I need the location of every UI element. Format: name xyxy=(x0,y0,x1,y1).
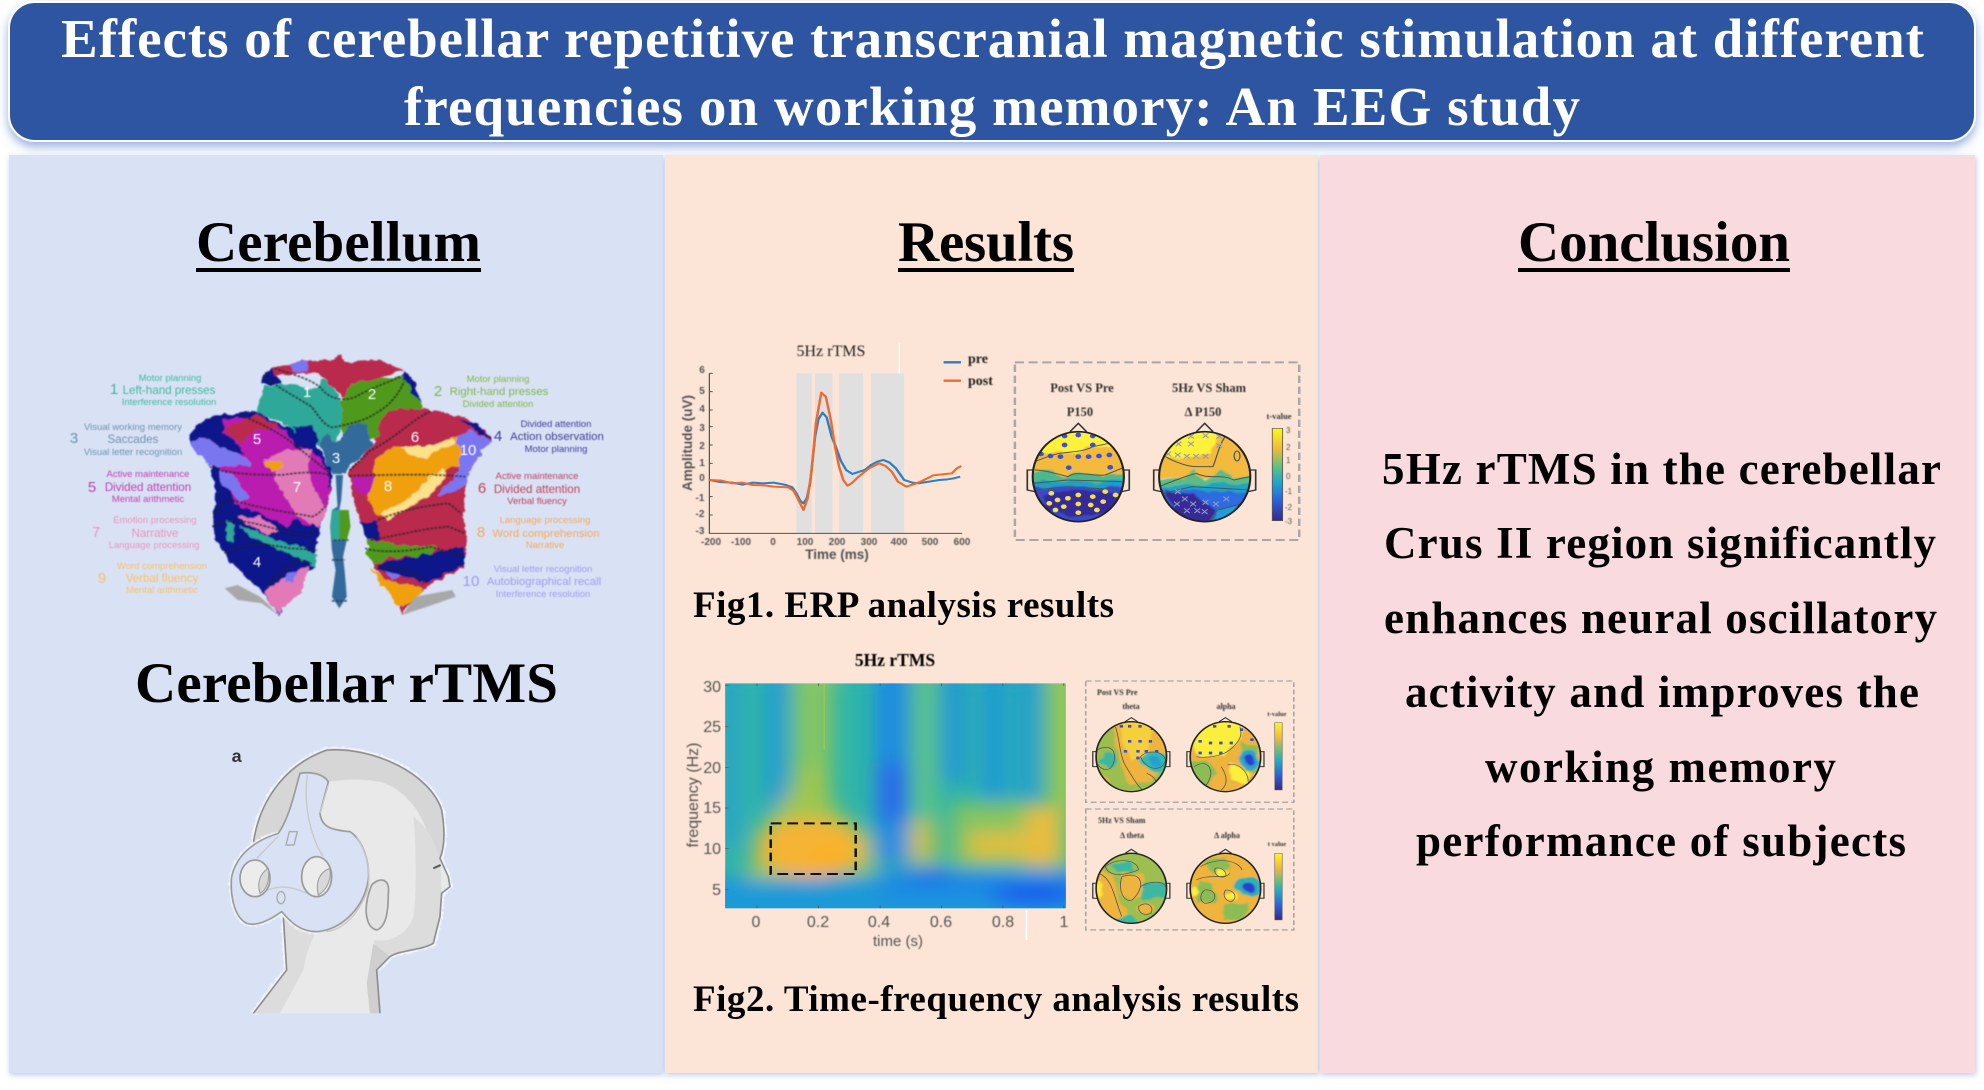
label: region 10: 10 xyxy=(463,573,479,590)
title banner: Effects of cerebellar repetitive transcranial magnetic stimulation at different xyxy=(61,8,1925,69)
illustration: head with figure-8 coil xyxy=(231,746,450,1013)
heatmap title: 5Hz rTMS xyxy=(855,650,935,670)
ERP traces xyxy=(709,343,962,533)
label: region 7: Emotion processing xyxy=(113,515,197,526)
coil wires xyxy=(257,775,369,932)
topomap alpha 5Hz vs sham xyxy=(1191,854,1260,923)
label: region 6: Divided attention xyxy=(494,483,580,496)
ERP topomap labels: Post VS Pre xyxy=(1050,381,1114,395)
colorbar ticks: -1 xyxy=(1285,487,1293,496)
throat shading xyxy=(367,943,390,1013)
map region numbers: 6 xyxy=(411,429,419,446)
small topomap labels: theta xyxy=(1122,702,1140,711)
topomap left xyxy=(1022,423,1134,527)
label: region 1 xyxy=(110,373,216,408)
figure: time-frequency topographies xyxy=(1084,681,1294,930)
small topomap labels: t-value xyxy=(1267,711,1287,718)
right winding xyxy=(302,857,332,897)
label: region 9: Verbal fluency xyxy=(126,572,199,585)
conclusion text xyxy=(1382,444,1941,866)
face shading xyxy=(373,817,442,957)
ERP axes labels: 6 xyxy=(699,365,705,376)
label: region 3: Saccades xyxy=(108,433,159,446)
label: region 10 xyxy=(463,564,601,600)
label: region 3 xyxy=(70,422,182,458)
map region numbers: 10 xyxy=(460,442,476,459)
title banner: frequencies on working memory: An EEG study xyxy=(404,76,1580,137)
conclusion text: 5Hz rTMS in the cerebellar xyxy=(1382,444,1941,494)
label: region 4: Motor planning xyxy=(525,444,587,455)
conclusion text: performance of subjects xyxy=(1416,816,1906,866)
heatmap axes labels: 1 xyxy=(1060,914,1069,931)
heading: Results: Results xyxy=(898,211,1074,274)
ERP axes labels: 600 xyxy=(954,537,971,548)
label: region 5: Mental arithmetic xyxy=(112,494,184,505)
label: region 4: Action observation xyxy=(510,431,604,443)
label: region 8: 8 xyxy=(477,524,485,541)
conclusion text: enhances neural oscillatory xyxy=(1384,593,1938,643)
ERP legend: pre xyxy=(968,352,988,367)
ERP topomap labels: P150 xyxy=(1067,405,1093,419)
panel: cerebellum background xyxy=(9,155,663,1073)
ERP legend xyxy=(968,352,993,389)
heatmap axes labels: 10 xyxy=(703,841,721,858)
label: region 10: Interference resolution xyxy=(496,589,590,600)
heatmap axes labels: 15 xyxy=(703,800,721,817)
small topomap labels xyxy=(1097,688,1287,848)
ERP axes labels: -3 xyxy=(696,526,705,537)
ERP axes labels: 200 xyxy=(829,537,846,548)
label: region 9 xyxy=(98,561,207,596)
label: region 4 xyxy=(494,419,604,455)
ERP axes labels: -200 xyxy=(701,537,721,548)
label: region 5: Active maintenance xyxy=(107,469,189,480)
map region numbers: 3 xyxy=(332,450,340,467)
heatmap axes labels: 0.8 xyxy=(992,914,1014,931)
label: region 8: Language processing xyxy=(500,515,590,526)
caption: Fig2: Fig2. Time-frequency analysis results xyxy=(693,979,1299,1020)
label: region 9: Mental arithmetic xyxy=(126,585,198,596)
label: region 10: Autobiographical recall xyxy=(487,576,601,588)
heatmap axes labels: 5 xyxy=(712,882,721,899)
label: region 1: 1 xyxy=(110,381,118,398)
ERP topomap shapes xyxy=(1015,362,1299,540)
ERP axes labels: Amplitude (uV) xyxy=(680,395,695,491)
label: region 3: Visual working memory xyxy=(84,422,182,433)
label: region 8: Word comprehension xyxy=(492,528,600,540)
ERP axes labels: 2 xyxy=(699,441,705,452)
ERP topomap labels: 5Hz VS Sham xyxy=(1172,381,1247,395)
map region numbers: 4 xyxy=(253,554,261,571)
map region numbers: 5 xyxy=(253,431,261,448)
heatmap axes labels: 0.2 xyxy=(807,914,829,931)
head outline xyxy=(253,750,450,1013)
ERP axes labels: 500 xyxy=(922,537,939,548)
heatmap axes labels xyxy=(685,679,1069,950)
head silhouette xyxy=(253,750,450,1013)
coil halo xyxy=(231,833,317,932)
heading: Cerebellum: Cerebellum xyxy=(196,211,481,274)
ERP topomap labels: t-value xyxy=(1266,411,1292,421)
label: region 9: 9 xyxy=(98,570,106,587)
label: region 6 xyxy=(478,471,580,507)
winding shading xyxy=(259,868,330,895)
label: region 9: Word comprehension xyxy=(117,561,207,572)
heading: Cerebellar rTMS: Cerebellar rTMS xyxy=(135,652,558,715)
title banner xyxy=(9,2,1975,141)
label: region 3: Visual letter recognition xyxy=(84,447,182,458)
nose and eye xyxy=(433,865,441,868)
ERP axes labels: 3 xyxy=(699,423,705,434)
map region numbers: 9 xyxy=(427,472,435,489)
heatmap axes labels: frequency (Hz) xyxy=(685,743,702,847)
label: region 7: Language processing xyxy=(109,540,199,551)
label: region 1: Interference resolution xyxy=(122,397,216,408)
panel letter a: a xyxy=(232,746,243,766)
ERP topomap labels: Δ P150 xyxy=(1185,405,1221,419)
ERP axes labels: 5 xyxy=(699,386,705,397)
colorbar ticks: 0 xyxy=(1286,472,1291,481)
ERP title: 5Hz rTMS xyxy=(797,343,865,360)
ERP axes labels: -2 xyxy=(696,509,705,520)
colorbar ticks xyxy=(1285,426,1293,526)
ERP axes labels: 0 xyxy=(770,537,776,548)
topomap theta post vs pre xyxy=(1096,722,1166,791)
map region numbers: 7 xyxy=(293,479,301,496)
label: region 8: Narrative xyxy=(526,540,564,551)
heatmap axes labels: 25 xyxy=(703,719,721,736)
heatmap axes labels: 0 xyxy=(752,914,761,931)
topomap theta 5Hz vs sham xyxy=(1096,854,1166,923)
ERP axes labels: -1 xyxy=(696,493,705,504)
small topomap shapes xyxy=(1084,681,1294,930)
colorbar xyxy=(1272,428,1283,521)
label: region 3: 3 xyxy=(70,430,78,447)
label: region 1: Left-hand presses xyxy=(123,384,216,397)
label: region 5 xyxy=(88,469,191,505)
head halo xyxy=(253,750,450,1013)
label: region 10: Visual letter recognition xyxy=(494,564,592,575)
heading: Conclusion: Conclusion xyxy=(1518,211,1790,274)
heatmap axes labels: 0.6 xyxy=(930,914,952,931)
ERP axes labels: -100 xyxy=(731,537,751,548)
conclusion text: activity and improves the xyxy=(1405,667,1919,717)
panel: conclusion background xyxy=(1320,155,1975,1073)
caption: Fig1: Fig1. ERP analysis results xyxy=(693,585,1114,626)
heatmap axes labels: 0.4 xyxy=(868,914,890,931)
ERP axes labels: 0 xyxy=(699,473,705,484)
chart: time-frequency heatmap xyxy=(685,650,1101,950)
label: region 1: Motor planning xyxy=(139,373,201,384)
ERP axes labels: 300 xyxy=(861,537,878,548)
heatmap surface xyxy=(725,683,1066,940)
map region numbers: 1 xyxy=(303,384,311,401)
label: region 2: Right-hand presses xyxy=(450,386,549,398)
ERP legend: post xyxy=(968,374,993,389)
flatmap shapes xyxy=(190,354,491,617)
label: region 2: Divided attention xyxy=(463,399,533,410)
ERP axes labels: Time (ms) xyxy=(805,547,869,562)
neck shading xyxy=(253,917,317,1013)
small topomap labels: Post VS Pre xyxy=(1097,688,1138,697)
label: region 4: Divided attention xyxy=(521,419,591,430)
label: region 7: 7 xyxy=(92,524,100,541)
label: region 5: 5 xyxy=(88,479,96,496)
figure: ERP topographies xyxy=(1015,362,1299,540)
ERP axes labels xyxy=(680,365,971,562)
small topomap labels: Δ theta xyxy=(1120,831,1144,840)
figure: cerebellar functional map xyxy=(70,354,604,617)
label: region 2: Motor planning xyxy=(467,374,529,385)
label: region 7: Narrative xyxy=(131,527,179,540)
ear xyxy=(366,880,388,930)
topomap alpha post vs pre xyxy=(1191,722,1260,791)
coil xyxy=(231,773,369,932)
label: region 7 xyxy=(92,515,199,551)
small topomap labels: t value xyxy=(1268,841,1286,848)
ERP axes labels: 400 xyxy=(891,537,908,548)
map region numbers: 8 xyxy=(384,478,392,495)
colorbar ticks: 2 xyxy=(1286,443,1291,452)
coil small marks xyxy=(277,832,297,904)
small topomap labels: Δ alpha xyxy=(1214,831,1240,840)
colorbar ticks: 3 xyxy=(1286,426,1291,435)
topomap right xyxy=(1152,422,1256,522)
hair shading xyxy=(253,750,444,863)
colorbar ticks: 1 xyxy=(1286,456,1291,465)
conclusion text: Crus II region significantly xyxy=(1384,518,1936,568)
label: region 8 xyxy=(477,515,600,551)
heatmap axes labels: 20 xyxy=(703,760,721,777)
panel: results background xyxy=(665,155,1318,1073)
small colorbars xyxy=(1275,723,1282,790)
label: region 2: 2 xyxy=(434,383,442,400)
colorbar ticks: -2 xyxy=(1285,503,1293,512)
label: region 6: 6 xyxy=(478,480,486,497)
label: region 6: Active maintenance xyxy=(496,471,578,482)
left winding xyxy=(240,860,270,897)
label: region 2 xyxy=(434,374,549,410)
ERP axes labels: 4 xyxy=(699,404,705,415)
colorbar ticks: -3 xyxy=(1285,517,1293,526)
map region numbers: 2 xyxy=(368,386,376,403)
map region numbers xyxy=(253,384,476,571)
ERP topomap labels xyxy=(1050,381,1292,421)
ERP axes labels: 1 xyxy=(699,458,705,469)
heatmap axes labels: time (s) xyxy=(873,933,923,950)
chart: ERP waveform xyxy=(680,343,993,562)
small topomap labels: alpha xyxy=(1216,702,1236,711)
conclusion text: working memory xyxy=(1485,742,1836,792)
label: region 4: 4 xyxy=(494,428,502,445)
label: region 6: Verbal fluency xyxy=(507,496,567,507)
small topomap labels: 5Hz VS Sham xyxy=(1098,816,1146,825)
ERP axes labels: 100 xyxy=(797,537,814,548)
heatmap axes labels: 30 xyxy=(703,679,721,696)
label: region 5: Divided attention xyxy=(105,481,191,494)
